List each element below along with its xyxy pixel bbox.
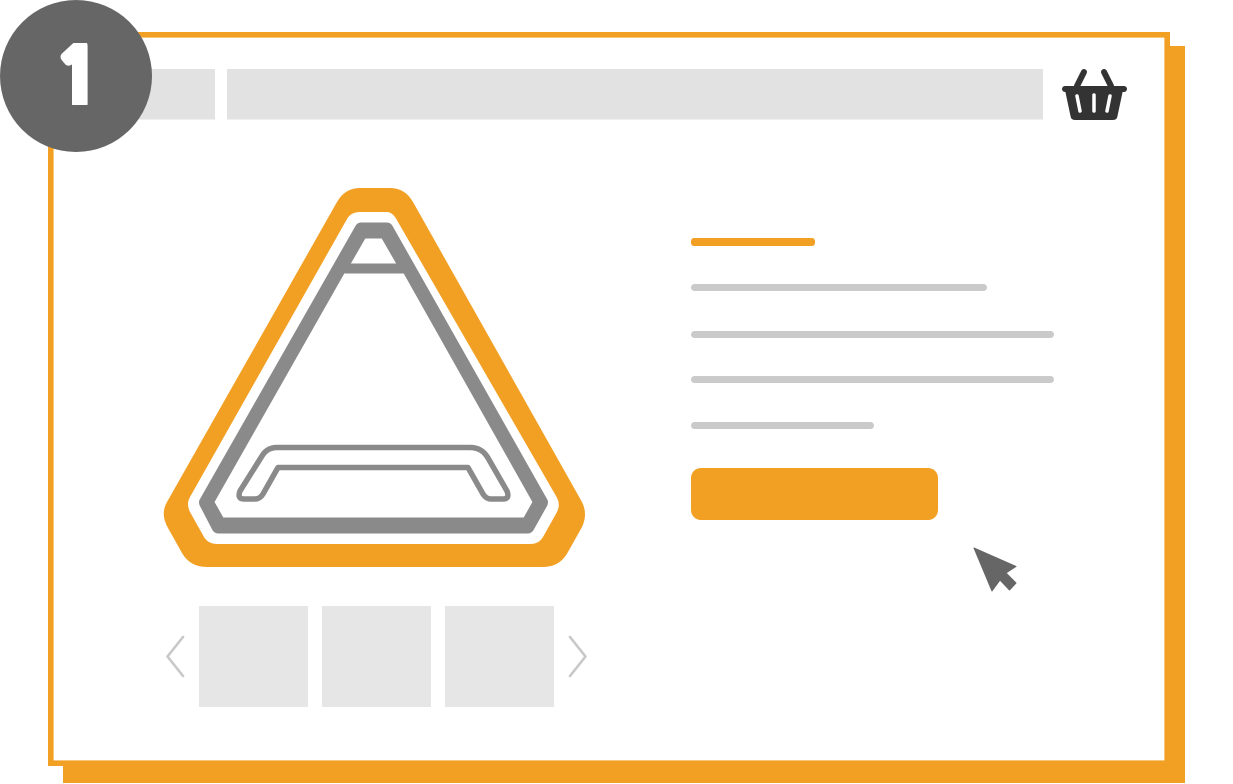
icon: left chevron [168, 637, 183, 676]
icon: warning triangle product [164, 188, 585, 567]
icon: shopping basket [1065, 72, 1124, 120]
icon: mouse cursor [974, 548, 1016, 591]
triangle grey inner frame [200, 223, 548, 533]
product title bar [691, 238, 815, 246]
triangle handle [239, 448, 508, 499]
triangle orange outer ring [164, 188, 585, 567]
step number badge [0, 0, 152, 152]
add to basket button [691, 468, 938, 520]
icon: right chevron [570, 637, 586, 676]
thumbnail strip [199, 606, 554, 707]
step number badge: 1 [54, 38, 102, 117]
header bars [130, 69, 1043, 120]
product description lines [691, 284, 1054, 429]
